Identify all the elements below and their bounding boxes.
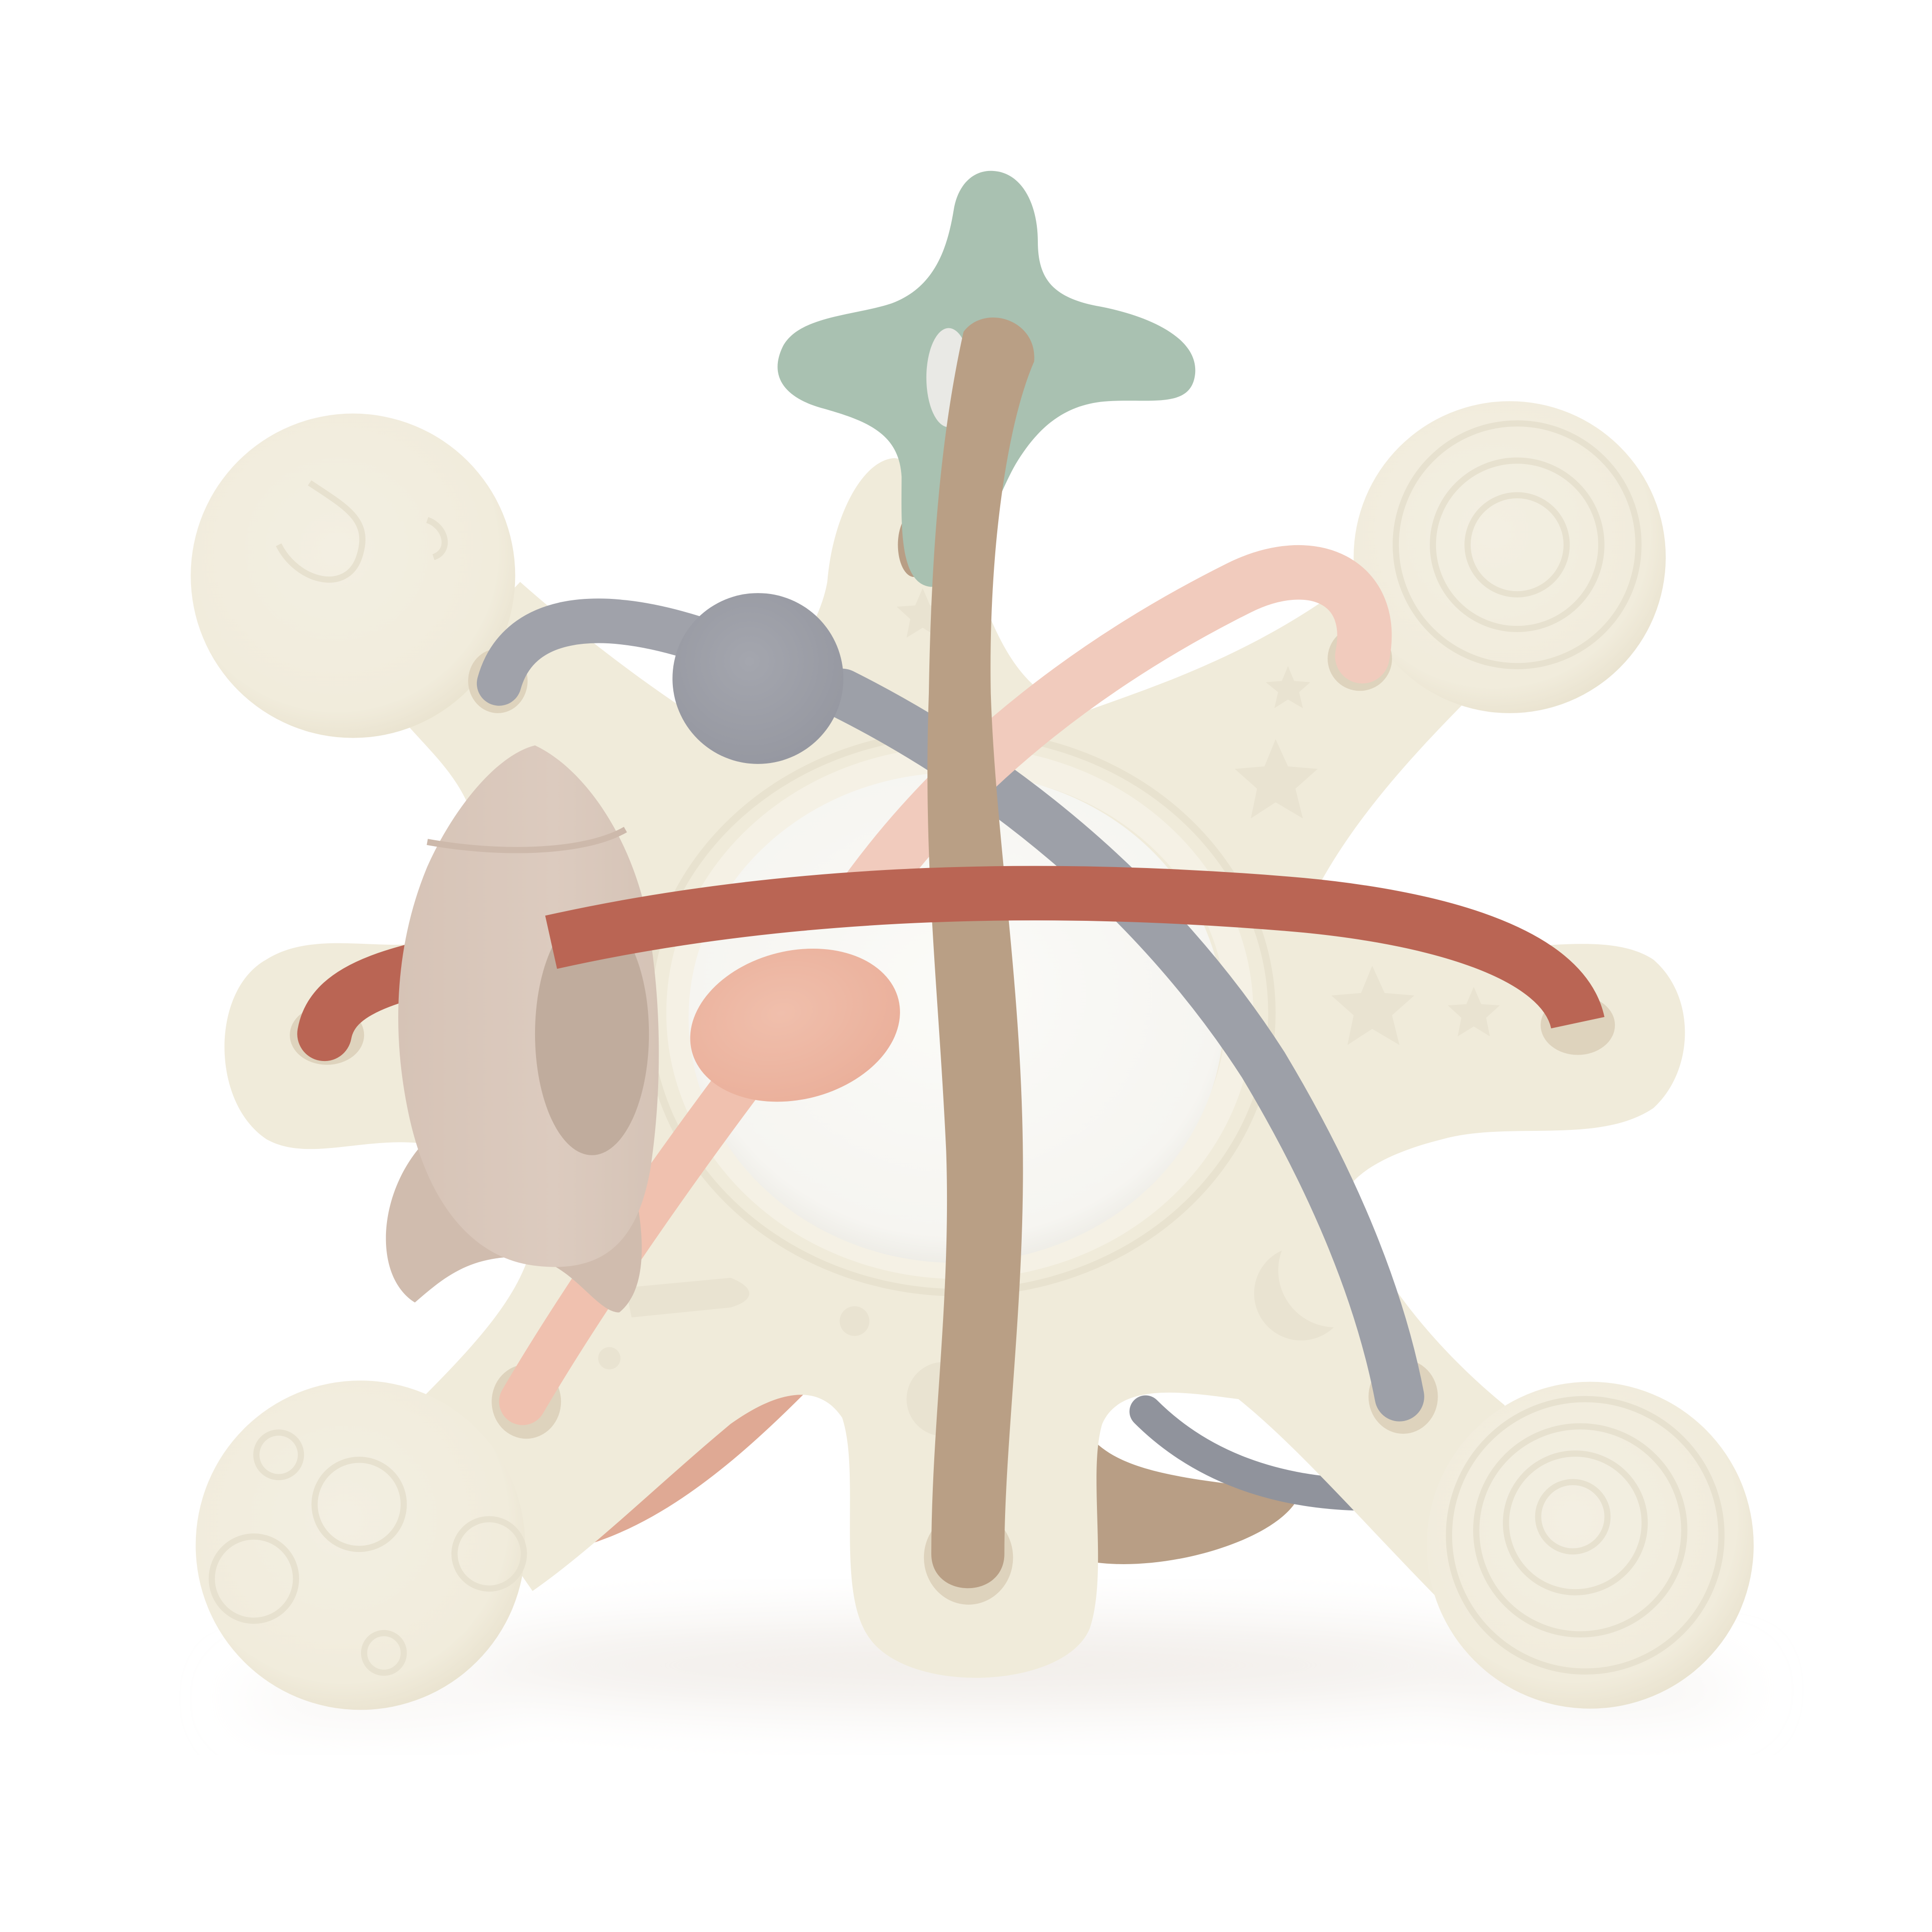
cross hole [926,328,971,427]
taupe vertical tube [927,318,1034,1588]
rocket fins [386,1139,642,1313]
white centre sphere [688,773,1224,1263]
body outline with eight arms [224,458,1685,1678]
red tube: main arc through rocket [551,893,1578,1023]
hub ring [648,733,1272,1293]
ball: top left [191,414,515,738]
star body [191,401,1754,1710]
gray tube: long sweep [842,693,1399,1397]
ball textures [212,424,1721,1673]
rear tube: pink [545,1387,805,1554]
rocket band [427,829,625,850]
ball: top right [1353,401,1666,713]
red tube: left end behind rocket [324,943,545,1034]
pink tube [523,573,1364,1401]
top hole peg behind the cross [898,512,930,577]
embossed stars and moon [598,588,1500,1436]
rocket bead [386,745,659,1313]
ball: bottom right [1427,1382,1754,1709]
rear tube: gray [1146,1411,1356,1494]
rocket body [398,745,659,1267]
gray tube: upper-left segment [499,621,693,683]
rear tube: taupe [1090,1436,1300,1564]
tube holes [290,627,1615,1605]
pink bead [674,927,917,1123]
rear tubes behind the body [545,1387,1356,1564]
green cross bead [777,171,1195,587]
gray tube [499,621,1399,1397]
ball: bottom left [195,1380,525,1710]
pink tube: upper segment [867,573,1364,892]
floor shadow [236,1623,1746,1711]
pink tube: lower segment [523,1077,743,1401]
gray planet bead [672,593,843,764]
rocket hole [535,913,649,1155]
